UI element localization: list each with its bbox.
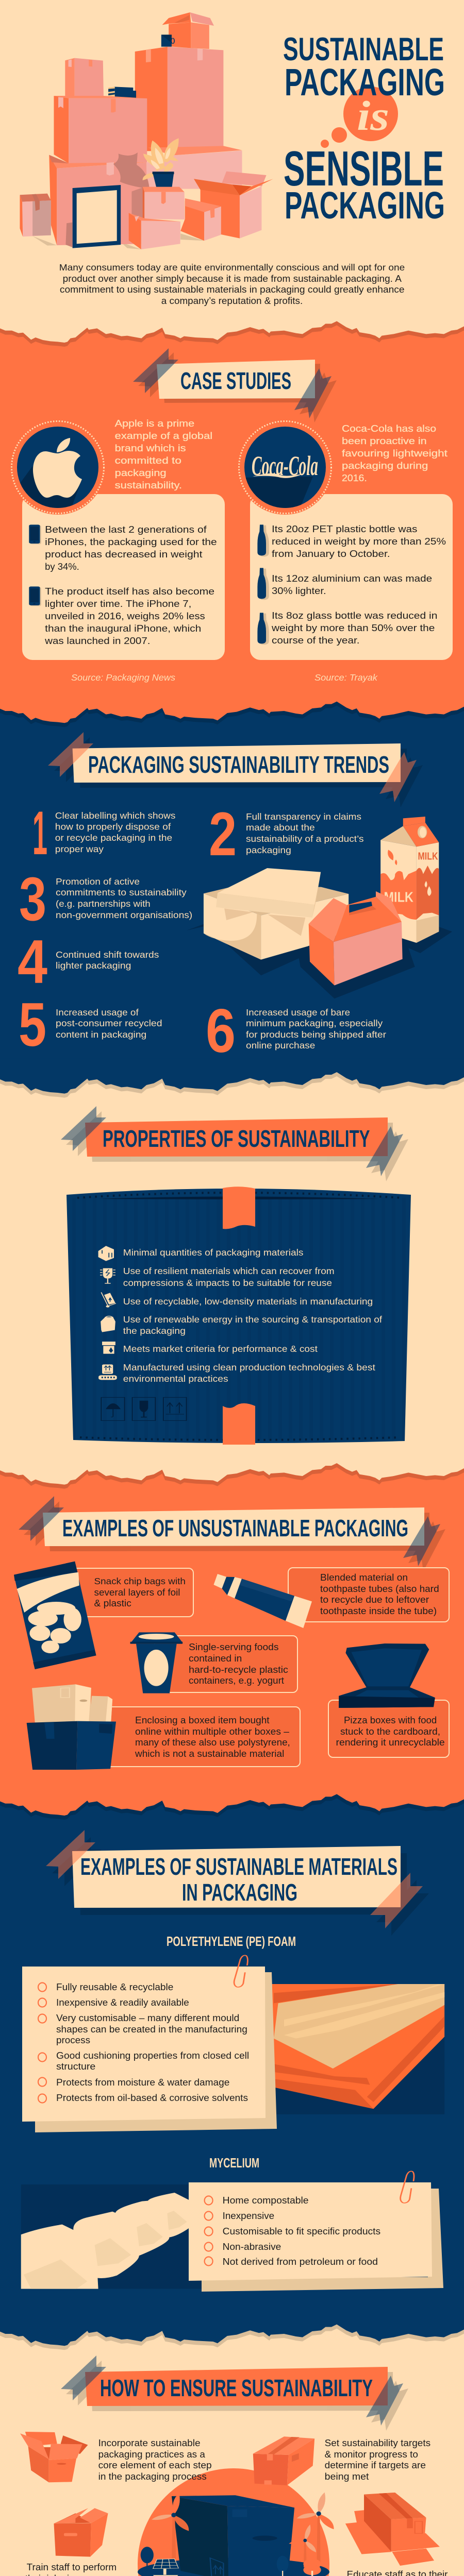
intro text: product over another simply because it is made from sustainable packaging. A bbox=[63, 274, 402, 284]
illustration: milk carton and cartons: MILK bbox=[418, 851, 438, 862]
panel: foam note: shapes can be created in the manufacturing bbox=[56, 2024, 247, 2035]
icon: conveyor bbox=[98, 1364, 117, 1380]
panel: apple case study: Source: Packaging News bbox=[71, 672, 175, 683]
panel: corrugated card of properties: compressions & impacts to be suitable for reuse bbox=[123, 1278, 332, 1288]
step: set sustainability targets: Set sustainability targets bbox=[325, 2438, 430, 2448]
step: incorporate sustainable packaging: packaging practices as a bbox=[98, 2449, 206, 2460]
callout: single-serving foods: contained in bbox=[189, 1653, 242, 1664]
panel: six trends list: commitments to sustainability bbox=[56, 887, 187, 897]
panel: apple case study: product has decreased in weight bbox=[45, 549, 202, 560]
icon: nested boxes bbox=[27, 1684, 116, 1770]
icon: yogurt cup bbox=[130, 1632, 183, 1693]
panel: six trends list: content in packaging bbox=[56, 1029, 146, 1040]
panel: apple case study: Apple is a prime bbox=[115, 418, 194, 429]
callout: multiple boxes: many of these also use polystyrene, bbox=[135, 1737, 290, 1748]
panel: coca-cola case study: course of the year. bbox=[272, 635, 360, 646]
callout: snack chip bags: Snack chip bags with bbox=[94, 1576, 186, 1586]
heading: examples of unsustainable packaging bbox=[19, 1496, 445, 1571]
panel: coca-cola case study: weight by more than 50% over the bbox=[271, 623, 435, 633]
step: train staff bbox=[25, 2508, 118, 2576]
callout: toothpaste tubes: to recycle due to leftover bbox=[320, 1595, 429, 1605]
step: incorporate sustainable packaging: in the packaging process bbox=[98, 2471, 207, 2482]
callout: multiple boxes bbox=[27, 1684, 300, 1770]
icon: coca-cola logo bbox=[252, 450, 318, 481]
panel: foam note: Protects from moisture & water damage bbox=[56, 2077, 229, 2088]
panel: corrugated card of properties: Use of resilient materials which can recover from bbox=[123, 1266, 335, 1276]
icon: apple logo bbox=[33, 438, 82, 498]
panel: coca-cola case study: favouring lightweight bbox=[342, 448, 448, 459]
icon: wind turbine right bbox=[297, 2493, 334, 2566]
callout: pizza boxes: rendering it unrecyclable bbox=[336, 1737, 445, 1748]
panel: coca-cola case study bbox=[238, 420, 453, 683]
panel: six trends list: Full transparency in claims bbox=[246, 811, 361, 822]
panel: coca-cola case study: been proactive in bbox=[342, 435, 427, 446]
panel: apple case study: The product itself has also become bbox=[45, 586, 214, 597]
icon: small wind turbine bbox=[289, 2524, 316, 2567]
panel: apple case study: lighter over time. The iPhone 7, bbox=[45, 599, 191, 609]
panel: six trends list: 4 bbox=[18, 927, 47, 996]
callout: snack chip bags bbox=[14, 1562, 193, 1669]
callout: pizza boxes bbox=[328, 1643, 449, 1757]
panel: six trends list: for products being shipped after bbox=[246, 1029, 386, 1040]
callout: toothpaste tubes: Blended material on bbox=[320, 1572, 408, 1583]
icon: hand truck bbox=[101, 1292, 116, 1308]
icon: toothpaste tube bbox=[213, 1574, 312, 1628]
icon: paperclip bbox=[401, 2171, 414, 2203]
panel: six trends list: or recycle packaging in the bbox=[55, 833, 172, 843]
panel: coca-cola case study: from January to October. bbox=[272, 549, 390, 559]
panel: coca-cola case study: Source: Trayak bbox=[314, 672, 378, 683]
panel: corrugated card of properties: environmental practices bbox=[123, 1374, 228, 1384]
callout: multiple boxes: online within multiple other boxes – bbox=[135, 1726, 289, 1737]
panel: apple case study: than the inaugural iPhone, which bbox=[45, 623, 201, 634]
icon: coca-cola logo: Coca-Cola bbox=[252, 450, 318, 481]
panel: six trends list: Promotion of active bbox=[56, 876, 140, 887]
icon: box bbox=[98, 1246, 114, 1261]
callout: single-serving foods bbox=[130, 1632, 297, 1693]
icon: fragile glass bbox=[100, 1268, 115, 1283]
panel: six trends list: 1 bbox=[32, 799, 47, 868]
panel: foam note bbox=[22, 1955, 277, 2132]
panel: corrugated card of properties: Manufactured using clean production technologies & best bbox=[123, 1362, 375, 1372]
panel: coca-cola case study: Its 8oz glass bottle was reduced in bbox=[272, 611, 437, 621]
title: is bbox=[357, 92, 389, 139]
step: incorporate sustainable packaging: Incorporate sustainable bbox=[98, 2438, 201, 2448]
panel: coca-cola case study: Its 20oz PET plastic bottle was bbox=[272, 524, 417, 534]
panel: six trends list bbox=[18, 799, 386, 1065]
panel: six trends list: post-consumer recycled bbox=[56, 1018, 162, 1028]
panel: corrugated card of properties: Meets market criteria for performance & cost bbox=[123, 1344, 318, 1354]
panel: mycelium note: Home compostable bbox=[223, 2195, 309, 2206]
panel: six trends list: 6 bbox=[206, 996, 236, 1065]
panel: foam note: Very customisable – many different mould bbox=[56, 2013, 239, 2023]
title bbox=[283, 31, 445, 227]
panel: corrugated card of properties: Use of renewable energy in the sourcing & transportation of bbox=[123, 1314, 382, 1325]
panel: six trends list: online purchase bbox=[246, 1040, 315, 1050]
illustration: milk carton and cartons: MILK bbox=[384, 889, 413, 905]
step: set sustainability targets: being met bbox=[325, 2471, 369, 2482]
panel: six trends list: how to properly dispose of bbox=[55, 822, 171, 832]
panel: apple case study: by 34%. bbox=[45, 562, 79, 572]
callout: multiple boxes: which is not a sustainable material bbox=[135, 1749, 284, 1759]
panel: apple case study: committed to bbox=[115, 455, 181, 466]
callout: toothpaste tubes: toothpaste inside the tube) bbox=[320, 1606, 437, 1616]
subheading: polyethylene foam: POLYETHYLENE (PE) FOAM bbox=[167, 1934, 296, 1949]
callout: single-serving foods: hard-to-recycle plastic bbox=[189, 1665, 288, 1675]
panel: corrugated card of properties: the packaging bbox=[123, 1326, 186, 1336]
callout: toothpaste tubes: toothpaste tubes (also hard bbox=[320, 1584, 439, 1594]
heading: examples of sustainable materials bbox=[46, 1830, 429, 1936]
icon: chip bag bbox=[14, 1562, 96, 1669]
panel: six trends list: 3 bbox=[19, 865, 46, 934]
step: incorporate sustainable packaging bbox=[20, 2432, 212, 2482]
panel: coca-cola case study: Its 12oz aluminium can was made bbox=[272, 573, 432, 584]
icon: trees and solar panel bbox=[141, 2547, 321, 2576]
panel: foam note: structure bbox=[56, 2061, 95, 2072]
panel: six trends list: packaging bbox=[246, 845, 291, 855]
panel: foam note: Inexpensive & readily available bbox=[56, 1997, 189, 2008]
panel: six trends list: sustainability of a product’s bbox=[246, 834, 364, 844]
panel: mycelium note: Non-abrasive bbox=[223, 2242, 281, 2252]
callout: snack chip bags: & plastic bbox=[94, 1598, 131, 1608]
hero illustration: stack of boxes bbox=[20, 12, 273, 249]
panel: coca-cola case study: Coca-Cola has also bbox=[342, 423, 436, 434]
step: train staff: Train staff to perform bbox=[27, 2562, 117, 2572]
panel: foam note: Protects from oil-based & corrosive solvents bbox=[56, 2093, 248, 2103]
callout: pizza boxes: stuck to the cardboard, bbox=[340, 1726, 440, 1737]
panel: six trends list: Continued shift towards bbox=[56, 950, 159, 960]
icon: carton with handle bbox=[101, 1316, 115, 1332]
panel: apple case study: unveiled in 2016, weighs 20% less bbox=[45, 611, 205, 621]
panel: six trends list: 5 bbox=[19, 990, 46, 1059]
panel: foam note: Good cushioning properties from closed cell bbox=[56, 2050, 249, 2061]
intro text: a company’s reputation & profits. bbox=[161, 296, 303, 306]
panel: foam note: Fully reusable & recyclable bbox=[56, 1982, 173, 1992]
icon: paperclip bbox=[234, 1955, 247, 1987]
panel: apple case study: example of a global bbox=[115, 430, 212, 441]
callout: multiple boxes: Enclosing a boxed item bought bbox=[135, 1715, 270, 1725]
heading: packaging sustainability trends bbox=[48, 732, 423, 807]
panel: six trends list: Clear labelling which shows bbox=[55, 810, 176, 821]
step: set sustainability targets: & monitor progress to bbox=[325, 2449, 418, 2460]
panel: apple case study: iPhones, the packaging used for the bbox=[45, 537, 217, 547]
panel: coca-cola case study: 30% lighter. bbox=[272, 586, 326, 596]
step: incorporate sustainable packaging: core element of each step bbox=[98, 2460, 212, 2470]
heading: how to ensure sustainability bbox=[61, 2355, 408, 2431]
intro text: commitment to using sustainable materials in packaging could greatly enhance bbox=[60, 284, 405, 295]
panel: six trends list: Increased usage of bbox=[56, 1007, 139, 1018]
panel: mycelium note: Inexpensive bbox=[223, 2211, 274, 2221]
intro text bbox=[59, 262, 405, 306]
step: set sustainability targets bbox=[253, 2436, 430, 2485]
panel: apple case study bbox=[10, 418, 225, 683]
panel: coca-cola case study: reduced in weight by more than 25% bbox=[272, 536, 446, 547]
heading: properties of sustainability bbox=[61, 1106, 408, 1181]
panel: corrugated card of properties: Minimal quantities of packaging materials bbox=[123, 1247, 304, 1258]
panel: six trends list: minimum packaging, especially bbox=[246, 1018, 383, 1028]
panel: six trends list: lighter packaging bbox=[56, 960, 131, 971]
panel: mycelium note bbox=[189, 2171, 443, 2292]
callout: toothpaste tubes bbox=[213, 1568, 449, 1628]
panel: apple case study: brand which is bbox=[115, 443, 186, 453]
panel: corrugated card of properties: Use of recyclable, low-density materials in manufacturing bbox=[123, 1296, 373, 1307]
panel: mycelium note: Not derived from petroleum or food bbox=[223, 2257, 378, 2267]
step: set sustainability targets: determine if targets are bbox=[325, 2460, 426, 2470]
panel: six trends list: (e.g. partnerships with bbox=[56, 899, 151, 909]
panel: six trends list: non-government organisations) bbox=[56, 910, 192, 920]
heading: case studies bbox=[133, 348, 337, 422]
panel: coca-cola case study: 2016. bbox=[342, 472, 367, 483]
subheading: mycelium: MYCELIUM bbox=[209, 2155, 259, 2171]
illustration: globe with wind turbines and big box bbox=[138, 2468, 334, 2576]
panel: coca-cola case study: packaging during bbox=[342, 460, 428, 471]
panel: mycelium note: Customisable to fit specific products bbox=[223, 2226, 380, 2236]
panel: foam note: process bbox=[56, 2035, 90, 2045]
callout: single-serving foods: Single-serving foods bbox=[189, 1642, 278, 1652]
callout: snack chip bags: several layers of foil bbox=[94, 1587, 180, 1598]
illustration: mycelium blocks bbox=[21, 2184, 205, 2289]
panel: six trends list: made about the bbox=[246, 822, 315, 833]
icon: dark handling symbols bbox=[101, 1397, 187, 1420]
panel: six trends list: Increased usage of bare bbox=[246, 1007, 350, 1018]
panel: six trends list: proper way bbox=[55, 844, 104, 854]
callout: pizza boxes: Pizza boxes with food bbox=[344, 1715, 437, 1725]
icon: jar bbox=[102, 1342, 115, 1354]
illustration: milk carton and cartons bbox=[187, 817, 452, 998]
panel: apple case study: sustainability. bbox=[115, 480, 182, 490]
intro text: Many consumers today are quite environmentally conscious and will opt for one bbox=[59, 262, 405, 273]
heading: examples of sustainable materials: IN PACKAGING bbox=[182, 1879, 297, 1906]
panel: apple case study: packaging bbox=[115, 467, 167, 478]
icon: pizza box bbox=[339, 1643, 435, 1708]
step: educate staff bbox=[345, 2493, 450, 2576]
panel: apple case study: was launched in 2007. bbox=[44, 636, 151, 646]
icon: wind turbine left bbox=[152, 2494, 189, 2563]
panel: apple case study: Between the last 2 generations of bbox=[45, 524, 207, 535]
panel: corrugated card of properties bbox=[67, 1187, 411, 1445]
heading: case studies: CASE STUDIES bbox=[180, 367, 291, 394]
callout: single-serving foods: containers, e.g. yogurt bbox=[189, 1675, 284, 1686]
panel: six trends list: 2 bbox=[209, 800, 237, 869]
illustration: foam sheets bbox=[267, 1984, 444, 2114]
